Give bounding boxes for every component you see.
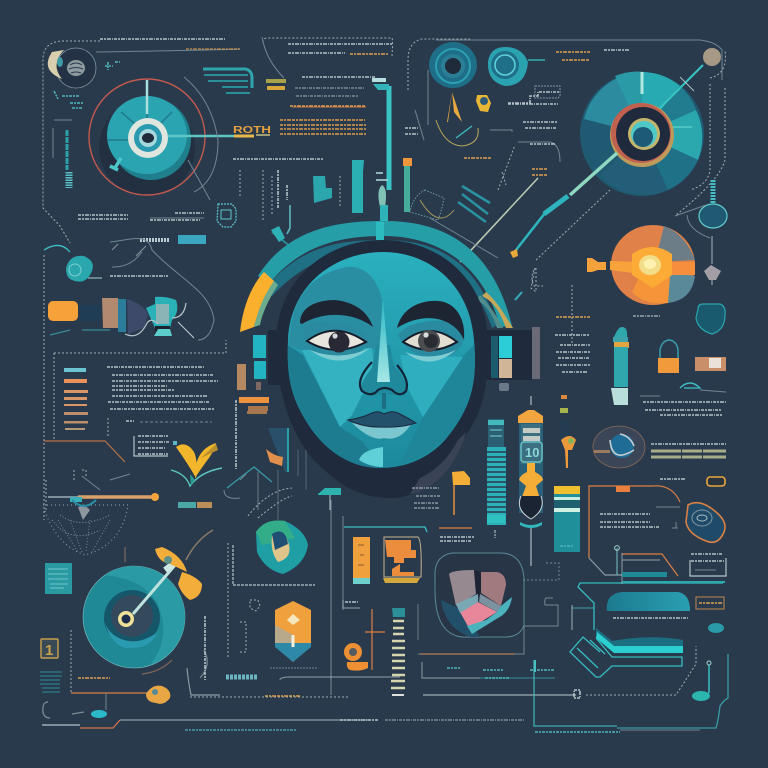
panel: bottom-right machine: [340, 546, 728, 732]
right cheek: [400, 355, 463, 417]
icon: yellow check mark: [171, 443, 222, 486]
chart: teal record disc: [83, 566, 185, 668]
icon: teal pendant: [675, 180, 727, 238]
label: dial heading: ROTH: [233, 124, 271, 136]
panel: orange callout: [589, 486, 680, 558]
icon: grey crystal: [704, 236, 721, 285]
panel: machine top outline: [589, 546, 726, 584]
icon: teal tab block: [203, 69, 252, 93]
chart: dotted half dome: [43, 500, 128, 555]
icon: orange badge: [48, 301, 78, 321]
icon: numbered badge: [41, 639, 58, 659]
illustration: orange test tube: 10: [525, 445, 539, 460]
chart: top-right segmented disc: [580, 72, 704, 196]
icon: cyan pill: [91, 710, 107, 718]
outline: tray arms: [570, 583, 723, 677]
eye left: [307, 331, 366, 352]
icon: small circuit badge: [217, 204, 236, 227]
icon: brain emblem: [48, 48, 96, 88]
icon: orange webcam: [344, 643, 368, 671]
icon: teal lens: [488, 47, 528, 86]
icon: blue eye circle: [429, 42, 477, 88]
icon: yellow mark: [476, 95, 491, 112]
labels: teal buttons: [140, 235, 206, 244]
icon: orange pin: [560, 395, 576, 468]
icon: orange shield: [275, 601, 311, 662]
icon: teal rounded square: [696, 304, 725, 334]
icon: coiled blob: [686, 503, 725, 542]
panel: top-right eye icons: [405, 39, 725, 215]
panel: bottom-left turntable: [40, 530, 368, 730]
icon: numbered badge: 1: [45, 642, 53, 659]
panel: headset side details: [410, 186, 536, 300]
panel: text block frame: [54, 340, 226, 440]
arrow: turntable arm: [133, 530, 213, 614]
eyebrow left: [300, 300, 373, 327]
chart: teal bar: [554, 486, 580, 552]
stacked orange bars: [64, 368, 88, 430]
left cheek: [302, 348, 376, 427]
icon: tan box: [695, 357, 726, 371]
icon: teal document: [45, 563, 72, 594]
panel: bottom centre: [187, 500, 559, 697]
illustration: capsule: [50, 297, 194, 338]
icon: teal swirl: [66, 256, 102, 282]
icon: teal tab: [318, 488, 341, 495]
left forehead shade: [289, 267, 382, 350]
icon: teal bottle: [611, 327, 629, 405]
arrow: dial pointer: [168, 135, 270, 136]
chart: ladder tick column: [391, 608, 405, 695]
illustration: folded heart shield: [435, 553, 524, 637]
label: small tag: [226, 674, 258, 680]
arrow: orange slider: [48, 493, 159, 502]
panel: left capsule diagram: [43, 238, 226, 555]
nose: [360, 300, 407, 409]
text: small list: [134, 436, 177, 456]
text: orange paragraph: [280, 88, 366, 134]
headband arcs: [240, 221, 513, 332]
chart: left vertical scale: [53, 120, 72, 188]
head shadow and neck: [276, 240, 488, 498]
text: right description: [643, 402, 726, 415]
panel: orange robot cards: [344, 527, 427, 584]
under-eye patches: [302, 321, 464, 362]
chin: [359, 447, 383, 467]
left side band: [288, 345, 380, 468]
chart: teal dial: [89, 79, 205, 196]
ear cups: [237, 327, 540, 391]
icon: padlock orange: [658, 340, 679, 373]
eye right: [403, 330, 457, 352]
illustration: orange test tube: [518, 396, 543, 566]
chart: orange sun disc: [587, 225, 695, 305]
icon: small yellow pill: [266, 79, 286, 90]
eyebrow right: [397, 301, 464, 340]
panel: top-left dial panel: [43, 37, 392, 244]
icon: grey knob: [703, 48, 721, 66]
panel: thin tech columns above head: [240, 78, 412, 254]
icon: orange stone: [146, 686, 170, 704]
panel: left mid details beside head: [224, 397, 341, 657]
icon: yellow flag: [452, 471, 470, 515]
panel: right column widgets: [532, 180, 727, 558]
label: teal tag: [178, 502, 212, 508]
mouth: [348, 412, 416, 439]
icon: teal pebble: [708, 623, 724, 633]
icon: yellow badge: [707, 477, 725, 486]
illustration: head and face: [237, 221, 540, 498]
chart: laptop tray: [596, 592, 690, 656]
icon: oval gauge: [593, 426, 645, 468]
panel: vertical instruments: [412, 395, 580, 566]
chart: teal striped tube: [487, 419, 506, 525]
arrow: circuit lines right: [340, 646, 728, 732]
label: orange tag: [696, 597, 724, 609]
face base: [288, 252, 475, 468]
text: olive list: [651, 444, 726, 457]
right side shade: [400, 345, 475, 464]
arrow: long needle from head to disc: [460, 65, 703, 262]
text: tiny label cluster: [412, 488, 440, 508]
icon: orange cone: [447, 92, 462, 122]
icon: teal green ring: [256, 520, 308, 574]
text: paragraph: [107, 367, 218, 409]
